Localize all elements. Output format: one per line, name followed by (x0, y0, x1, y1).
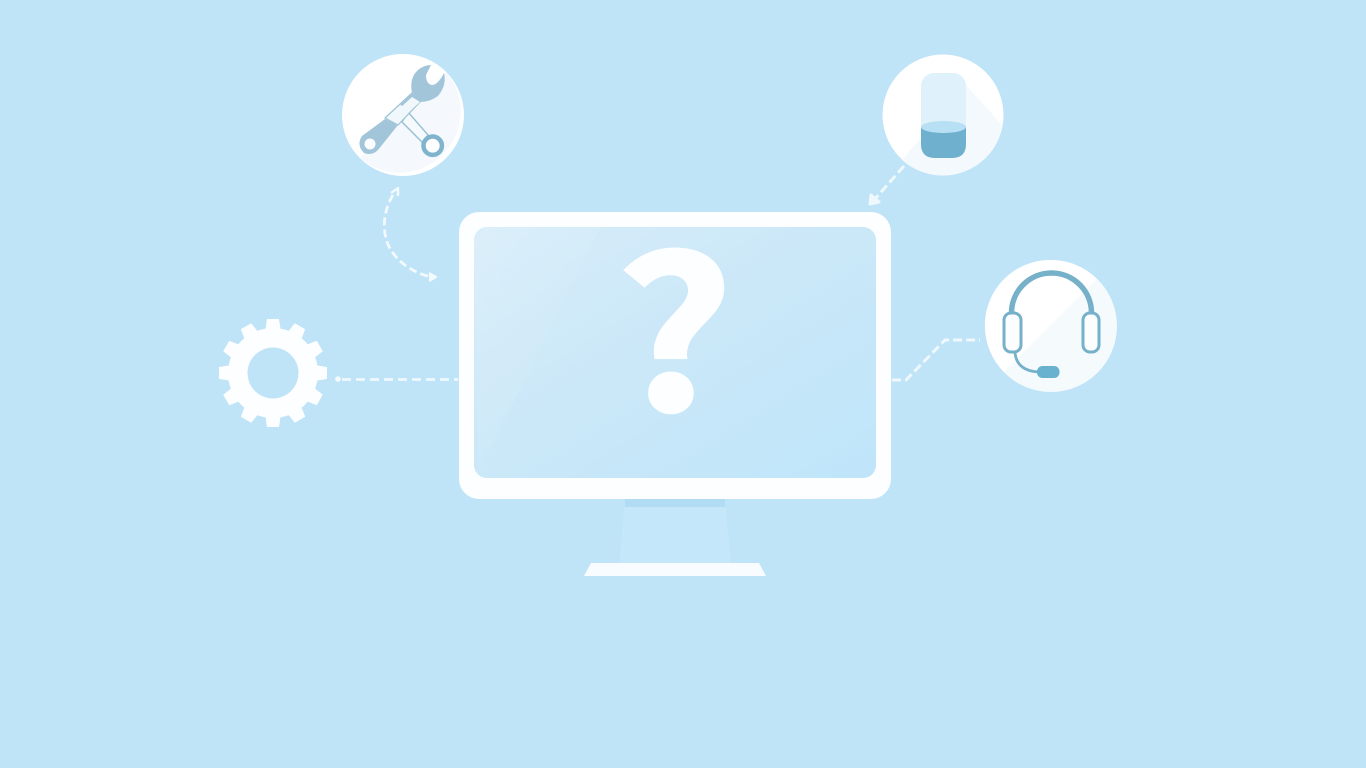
icon: cylinder with liquid (882, 54, 1004, 176)
arrow: wrench to monitor, dashed curve (384, 188, 436, 281)
monitor frame (459, 212, 891, 499)
connector: gear to monitor, dashed (335, 376, 458, 382)
monitor screen (474, 227, 876, 478)
icon: wrench and spanner (342, 54, 464, 176)
question mark: ? (615, 170, 734, 471)
connector: monitor to headset, dashed (892, 340, 980, 380)
icon: headset (985, 260, 1117, 392)
monitor (459, 170, 891, 576)
wrench (359, 65, 445, 154)
icon: gear (219, 319, 327, 427)
monitor stand (584, 499, 766, 576)
arrow: cylinder to monitor, dashed (870, 166, 904, 204)
spanner with ring end (402, 112, 442, 155)
